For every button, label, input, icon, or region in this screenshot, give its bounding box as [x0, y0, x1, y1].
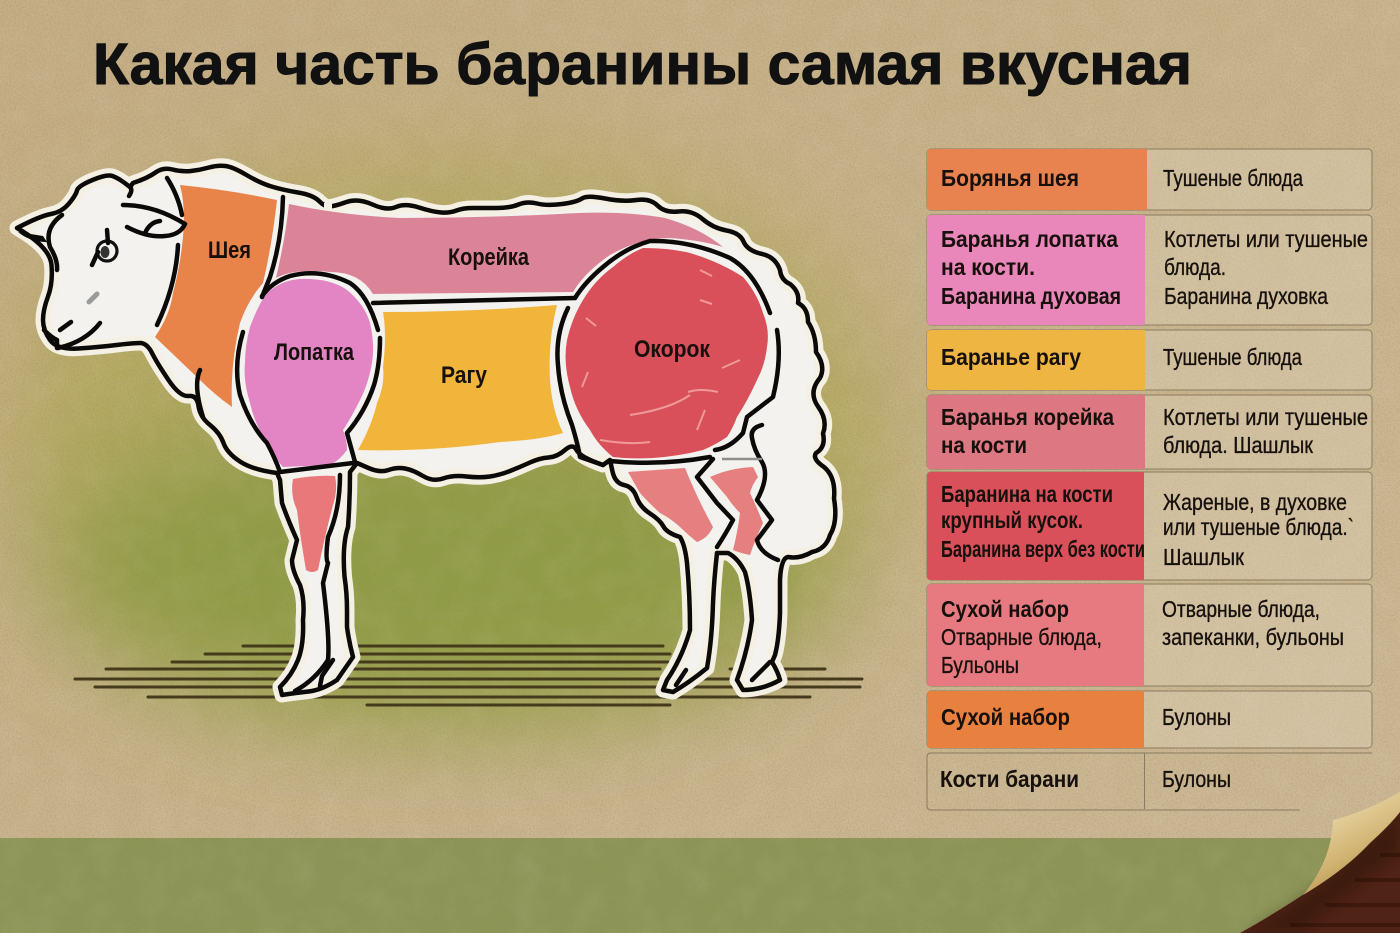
title: Какая часть баранины самая вкусная	[93, 32, 1192, 97]
row 1: Тушеные блюда	[1163, 165, 1303, 191]
label: leg: Окорок	[634, 336, 711, 363]
sheep body outline	[17, 166, 835, 695]
row 2: блюда.	[1164, 254, 1226, 280]
row 5: Шашлык	[1163, 544, 1245, 570]
label: loin: Корейка	[448, 244, 530, 271]
row 5: или тушеные блюда.`	[1163, 514, 1354, 540]
row 7	[927, 691, 1372, 748]
cut: hind shank far	[710, 467, 763, 555]
sheep contour lines	[197, 197, 779, 691]
row 4: блюда. Шашлык	[1163, 432, 1314, 458]
row 6	[927, 584, 1372, 686]
row 4: Баранья корейка	[941, 404, 1114, 430]
row 2: Баранина духовка	[1164, 283, 1328, 309]
sheep face	[18, 178, 185, 348]
row 3: Баранье рагу	[941, 344, 1081, 370]
row 6: Отварные блюда,	[941, 624, 1102, 650]
row 2: Баранина духовая	[941, 283, 1121, 309]
cut: neck	[155, 185, 277, 407]
page curl with wood corner	[1240, 792, 1400, 933]
row 5	[927, 472, 1372, 580]
row 6: Сухой набор	[941, 596, 1069, 622]
row 2	[927, 215, 1372, 325]
row 5: крупный кусок.	[941, 507, 1083, 533]
row 6: Бульоны	[941, 652, 1019, 678]
row 1: Борянья шея	[941, 165, 1079, 191]
table of cuts	[927, 149, 1372, 810]
row 8	[927, 753, 1372, 810]
row 3: Тушеные блюда	[1163, 344, 1302, 370]
label: neck: Шея	[208, 237, 251, 264]
row 5: Баранина верх без кости	[941, 536, 1145, 562]
label: stew: Рагу	[441, 362, 488, 389]
row 7: Сухой набор	[941, 704, 1070, 730]
row 5: Жареные, в духовке	[1163, 489, 1347, 515]
row 4	[927, 395, 1372, 469]
cut: shoulder	[245, 279, 373, 467]
row 2: Котлеты или тушеные	[1164, 226, 1368, 252]
row 2: Баранья лопатка	[941, 226, 1118, 252]
row 5: Баранина на кости	[941, 481, 1113, 507]
cut: leg	[566, 248, 768, 458]
row 4: на кости	[941, 432, 1027, 458]
row 8: Булоны	[1162, 766, 1231, 792]
cut: stew	[358, 305, 563, 450]
row 6: запеканки, бульоны	[1162, 624, 1344, 650]
row 7: Булоны	[1162, 704, 1231, 730]
row 6: Отварные блюда,	[1162, 596, 1320, 622]
label: shoulder: Лопатка	[274, 339, 355, 366]
cut: hind shank near	[628, 468, 713, 542]
ground hatch lines	[75, 646, 862, 705]
cut: loin	[276, 204, 723, 294]
sheep illustration	[17, 166, 835, 695]
cut: front shank	[292, 476, 336, 572]
row 1	[927, 149, 1372, 210]
row 8: Кости барани	[940, 766, 1079, 792]
row 4: Котлеты или тушеные	[1163, 404, 1368, 430]
row 2: на кости.	[941, 254, 1035, 280]
row 3	[927, 330, 1372, 390]
